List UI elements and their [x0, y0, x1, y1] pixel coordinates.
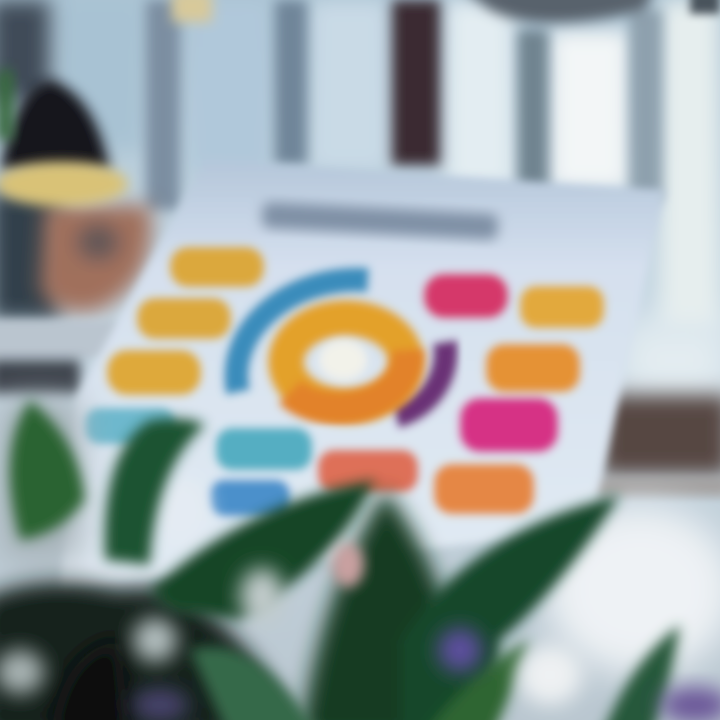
distant building right	[570, 395, 720, 496]
left column: yellow labels	[107, 247, 264, 395]
infographic poster sheet	[60, 160, 665, 590]
right labels: pink and orange	[424, 274, 604, 514]
window frame posts	[146, 0, 720, 210]
person at left with hat	[0, 0, 151, 320]
bottom labels: teal, blue and red	[85, 408, 418, 516]
window ledge left	[0, 320, 120, 394]
foreground spots and flowers	[0, 543, 720, 720]
foreground plant leaves	[0, 400, 680, 720]
blurred poster title	[262, 202, 499, 240]
foreground bright highlights	[0, 400, 720, 675]
donut chart	[236, 280, 446, 416]
